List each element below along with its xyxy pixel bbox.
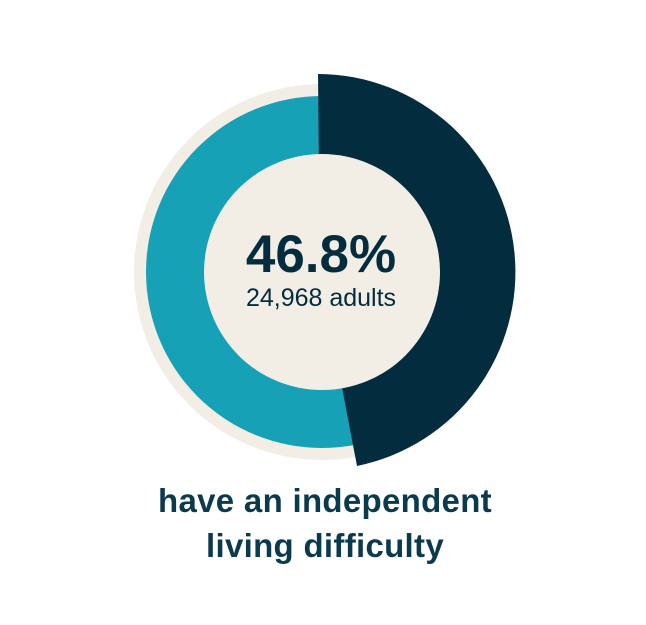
caption: living difficulty: [206, 527, 444, 564]
caption: [158, 482, 492, 564]
caption: have an independent: [158, 482, 492, 519]
teal segment: [146, 96, 498, 448]
count label: 24,968 adults: [246, 284, 396, 312]
dark segment 46.8%: [318, 74, 515, 466]
outer beige ring: [134, 84, 510, 460]
inner beige circle: [204, 154, 440, 390]
percentage label: 46.8%: [246, 225, 396, 284]
